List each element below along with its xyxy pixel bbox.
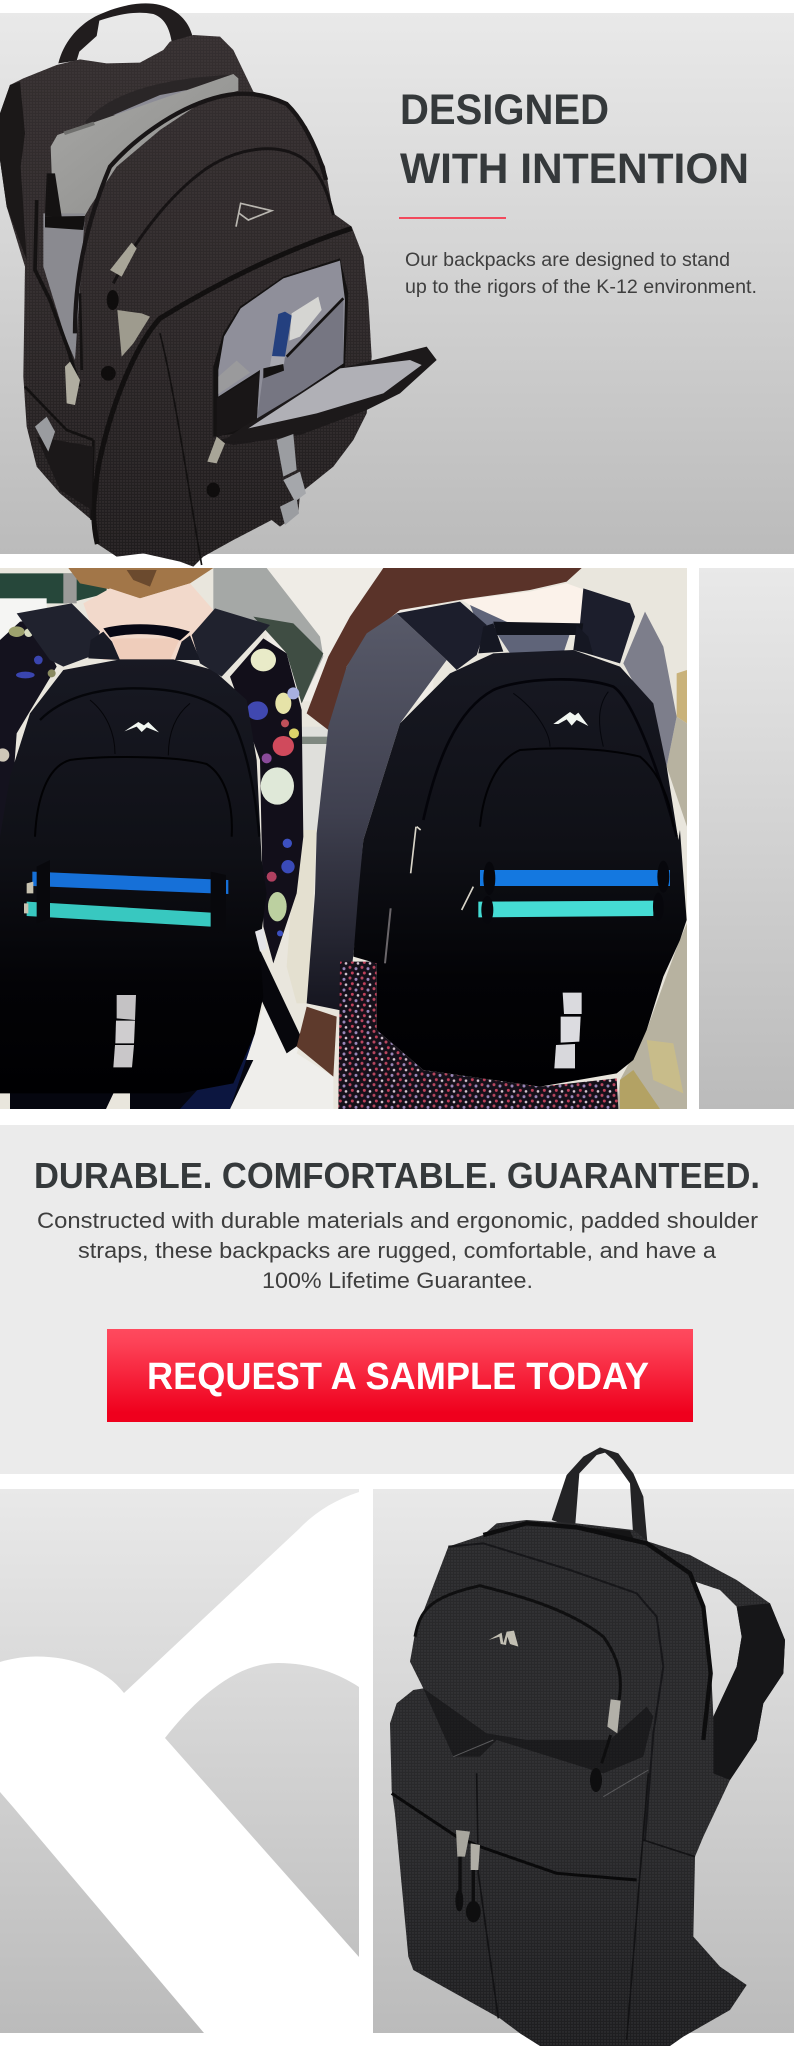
zipper pulls [607, 1699, 621, 1733]
logo [489, 1631, 518, 1647]
divider: red rule [399, 217, 506, 219]
icon: black slim backpack [390, 1447, 785, 2046]
panel: top hero background [0, 13, 794, 554]
person 1 neck [83, 583, 213, 660]
strap shading [713, 1603, 785, 1780]
laptop [51, 74, 238, 218]
zipper pulls [110, 243, 137, 277]
text block: durability description [37, 1208, 758, 1293]
heading: Designed With Intention: WITH INTENTION [400, 145, 749, 193]
person 1 legs [10, 1060, 253, 1109]
reflective strips [277, 434, 297, 477]
person 1 hair [68, 568, 213, 598]
text block: durability description: 100% Lifetime Guarantee. [262, 1268, 533, 1293]
icon: white brand mark [0, 1492, 359, 2033]
text block: durability description: Constructed with durable materials and ergonomic, padded shoulder [37, 1208, 758, 1233]
person 2 hair [307, 568, 582, 730]
person 2 shirt [470, 605, 570, 653]
heading: Designed With Intention: DESIGNED [400, 86, 609, 134]
person 1 floral sleeves [0, 620, 303, 963]
panel: logo mark background [0, 1489, 359, 2033]
person 1 hanging strap [260, 952, 300, 1054]
text block: hero description: Our backpacks are designed to stand [405, 250, 730, 271]
seams and zips [483, 1523, 711, 1740]
open pocket lining [213, 258, 348, 437]
person 2 skirt [338, 962, 618, 1109]
button: request a sample today [107, 1329, 693, 1422]
inner pocket lining [43, 213, 85, 360]
person 1 backpack [0, 659, 267, 1093]
laptop pocket shadow [85, 75, 233, 140]
heading: Designed With Intention [400, 86, 749, 193]
person 2 neck [462, 583, 585, 625]
zipper arcs [75, 94, 326, 333]
logo [236, 203, 272, 227]
heading: Durable Comfortable Guaranteed: DURABLE. COMFORTABLE. GUARANTEED. [34, 1155, 760, 1196]
person 2 hand [297, 1007, 337, 1077]
panel: photo of two students wearing backpacks [0, 568, 687, 1109]
phone and pen [289, 297, 322, 341]
main seam [94, 228, 352, 544]
text block: hero description: up to the rigors of the K-12 environment. [405, 277, 757, 298]
button: request a sample today: REQUEST A SAMPLE TODAY [147, 1356, 649, 1398]
open flap [213, 347, 437, 445]
panel: grey side panel beside photo [699, 568, 794, 1109]
person 2 backpack [353, 650, 687, 1087]
text block: hero description [405, 250, 757, 298]
icon: open black backpack with laptop [0, 3, 437, 567]
text block: durability description: straps, these backpacks are rugged, comfortable, and have a [78, 1238, 717, 1263]
panel: call to action background [0, 1125, 794, 1474]
panel: backpack product background [373, 1489, 794, 2033]
